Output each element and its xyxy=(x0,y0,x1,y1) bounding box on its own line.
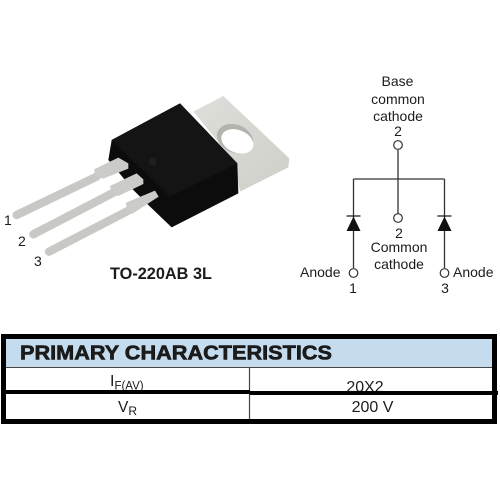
base pin number: 2 xyxy=(394,123,402,139)
terminal: common cathode xyxy=(394,214,402,222)
common text: Common xyxy=(371,239,427,255)
outer border xyxy=(4,336,494,422)
pin label 1: 1 xyxy=(4,212,12,228)
thick row line xyxy=(4,390,498,395)
lead 3 xyxy=(49,191,159,252)
diode left xyxy=(346,216,360,231)
pin label 3: 3 xyxy=(34,253,42,269)
terminal: base xyxy=(394,141,402,149)
cathode label: cathode xyxy=(373,108,423,124)
anode right: Anode xyxy=(453,264,494,280)
lead 2 xyxy=(33,173,143,234)
terminal: anode 3 xyxy=(440,269,449,277)
cell: IF(AV): I xyxy=(110,373,114,390)
row separators xyxy=(4,366,494,368)
base label: Base xyxy=(382,73,414,89)
pin 3 number: 3 xyxy=(441,280,449,296)
cell: 200 V: 200 V xyxy=(352,399,394,416)
header text: PRIMARY CHARACTERISTICS xyxy=(20,342,332,364)
mounting hole xyxy=(212,119,258,159)
terminal: anode 1 xyxy=(349,269,358,277)
table: primary characteristics xyxy=(4,336,498,422)
diode right xyxy=(438,216,452,231)
black moulded body xyxy=(108,103,238,227)
cell: VR: V xyxy=(118,399,128,416)
moulding dimple xyxy=(149,158,157,166)
lead 1 xyxy=(17,158,128,215)
common pin number: 2 xyxy=(395,225,403,241)
cathode text: cathode xyxy=(374,256,424,272)
anode left: Anode xyxy=(300,264,341,280)
pin label 2: 2 xyxy=(18,233,26,249)
cell: 20X2: 20X2 xyxy=(346,379,384,396)
cell: VR: R xyxy=(128,404,137,418)
icon: TO-220AB transistor package xyxy=(17,96,289,252)
common label: common xyxy=(371,91,425,107)
cell: IF(AV): F(AV) xyxy=(114,380,144,392)
metal tab xyxy=(193,96,289,192)
package name: TO-220AB 3L xyxy=(110,265,212,283)
header band xyxy=(4,337,494,367)
circuit diagram xyxy=(300,73,494,296)
pin 1 number: 1 xyxy=(349,280,357,296)
wiring xyxy=(354,150,444,268)
body top face xyxy=(112,103,237,197)
